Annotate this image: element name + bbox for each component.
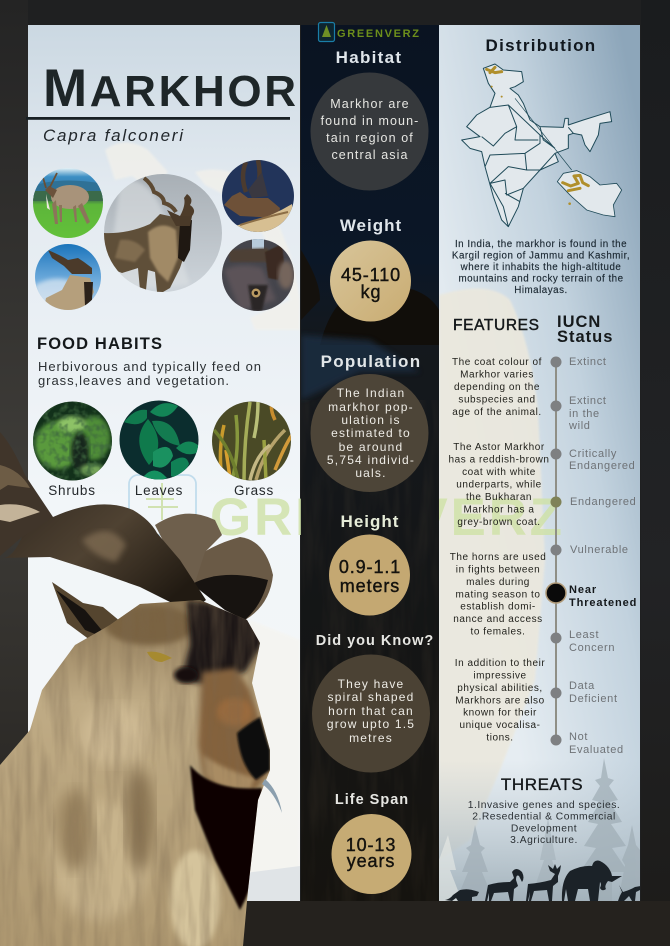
animal: big cat (445, 889, 479, 901)
timeline: IUCN status: Near (569, 584, 597, 596)
text: features: The coat colour of (452, 357, 542, 368)
text: features: impressive (473, 670, 527, 682)
text: features: Markhors are also (455, 696, 545, 706)
panel: left background (28, 25, 300, 901)
did you know: Did you Know? (316, 633, 434, 649)
did you know: They have (338, 677, 404, 691)
animal: monkey (618, 885, 641, 901)
animal: deer (526, 864, 561, 901)
timeline: IUCN status: wild (568, 420, 591, 432)
text: threats list: 1.Invasive genes and species. (468, 800, 620, 811)
text: features: grey-brown coat. (457, 517, 541, 528)
heading: IUCN status: Status (557, 328, 613, 346)
text: features: to females. (471, 626, 525, 638)
food: leaves (119, 400, 199, 498)
heading: distribution: Distribution (486, 36, 596, 55)
did you know: grow upto 1.5 (327, 717, 415, 731)
text: features: physical abilities, (457, 683, 543, 694)
photo: markhor on meadow (33, 168, 103, 238)
text: features: mating season to (456, 590, 540, 600)
watermark: Greenverz (129, 475, 562, 547)
population: be around (339, 440, 403, 454)
text: features: Markhor varies (460, 370, 534, 380)
timeline: IUCN status: Not (569, 731, 588, 743)
photo: markhor standing, large (104, 174, 222, 292)
timeline: IUCN status (546, 356, 637, 756)
timeline: IUCN status: Deficient (569, 693, 618, 705)
population: Population (321, 352, 421, 371)
text: India distribution description: Kargil region of Jammu and Kashmir, (452, 250, 630, 262)
centre column (310, 48, 434, 894)
timeline: IUCN status: in the (569, 408, 600, 420)
text: food habits description: Herbivorous and typically feed on (38, 359, 261, 374)
logo: Greenverz (318, 22, 419, 42)
map: range highlights (487, 67, 588, 191)
text: features: The Astor Markhor (453, 442, 545, 453)
photo: markhor against sky (35, 244, 101, 312)
height (329, 512, 410, 616)
photo: markhor on log (222, 160, 294, 232)
did you know: metres (349, 731, 393, 745)
text: features: in fights between (456, 564, 540, 576)
text: threats list: 3.Agriculture. (510, 835, 578, 846)
text: features: depending on the (454, 382, 540, 393)
habitat: central asia (331, 148, 409, 162)
height: meters (340, 576, 400, 596)
heading: IUCN status: IUCN (557, 313, 601, 331)
habitat: Markhor are (330, 97, 410, 111)
food: grass (212, 401, 292, 498)
text: features (448, 357, 550, 744)
text: threats list (468, 800, 620, 846)
weight: Weight (340, 216, 402, 235)
horn: rear large (185, 537, 273, 620)
map: India distribution (462, 64, 622, 227)
animal: ibex (485, 869, 524, 901)
logo: Greenverz: GREENVERZ (337, 28, 419, 40)
life span: years (347, 851, 395, 871)
text: food habits description (38, 359, 261, 388)
timeline: IUCN status: Data (569, 680, 595, 692)
population: estimated to (331, 426, 411, 440)
ghost goat silhouette (439, 289, 545, 860)
photo: markhor eye closeup (222, 239, 294, 311)
did you know (312, 633, 434, 772)
text: features: known for their (463, 708, 537, 718)
timeline: IUCN status: Threatened (569, 597, 637, 609)
population: 5,754 individ- (327, 453, 415, 467)
heading: IUCN status (557, 313, 613, 346)
horn: rear middle (155, 514, 222, 592)
title: Markhor: MARKHOR (43, 59, 296, 118)
watermark logo box (129, 475, 196, 535)
life span: 10-13 (346, 835, 396, 855)
map: India outline (462, 64, 612, 227)
horn: left tip (0, 432, 55, 556)
text: features: In addition to their (455, 658, 545, 669)
text: India distribution description: In India, the markhor is found in the (455, 239, 627, 250)
population: uals. (355, 466, 387, 480)
photo circles (30, 160, 294, 312)
timeline: IUCN status: Endangered (569, 460, 635, 472)
habitat: tain region of (326, 131, 414, 145)
text: features: nance and access (453, 614, 543, 625)
timeline: IUCN status: Extinct (569, 395, 607, 407)
heading: threats: THREATS (501, 775, 583, 794)
text: features: subspecies and (458, 394, 536, 406)
weight: 45-110 (341, 265, 401, 285)
fur shading (105, 605, 195, 645)
subtitle: scientific name: Capra falconeri (43, 126, 184, 145)
body fur (0, 600, 270, 946)
text: features: the Bukharan (466, 492, 532, 503)
animal: elephant (562, 861, 622, 901)
timeline: IUCN status: Concern (569, 642, 615, 654)
did you know: horn that can (328, 704, 414, 718)
map: Kashmir inset (557, 171, 622, 217)
muzzle (198, 668, 270, 791)
panel: right background (439, 25, 640, 901)
text: India distribution description: mountains and rocky terrain of the (458, 274, 624, 284)
goatee tuft (262, 779, 282, 813)
text: threats list: 2.Resedential & Commercial (472, 812, 616, 822)
height: 0.9-1.1 (339, 557, 401, 577)
timeline: IUCN status: Extinct (569, 356, 607, 368)
text: India distribution description (452, 239, 630, 296)
weight: kg (361, 282, 381, 302)
animal silhouettes (445, 861, 641, 901)
text: features: establish domi- (460, 602, 536, 612)
text: threats list: Development (511, 824, 577, 834)
markhor foreground portrait (0, 432, 282, 946)
text: features: coat with white (462, 467, 536, 478)
food: leaves: Leaves (135, 483, 183, 498)
heading: features: FEATURES (453, 317, 539, 334)
ghost horn silhouette (106, 142, 298, 328)
habitat: Habitat (336, 48, 402, 67)
nose (237, 717, 270, 780)
timeline: IUCN status: Critically (569, 448, 617, 460)
panel: centre background (301, 25, 439, 901)
text: features: The horns are used (450, 552, 546, 563)
food: shrubs (33, 401, 113, 498)
text: features: age of the animal. (452, 407, 542, 418)
habitat: found in moun- (321, 114, 419, 128)
text: features: has a reddish-brown (448, 454, 550, 466)
text: India distribution description: where it inhabits the high-altitude (460, 262, 621, 273)
text: features: underparts, while (456, 480, 542, 490)
horn: main (0, 504, 206, 612)
text: India distribution description: Himalayas. (514, 285, 568, 296)
timeline: IUCN status: Vulnerable (570, 544, 629, 556)
heading: food habits: FOOD HABITS (37, 335, 162, 353)
text: features: tions. (486, 732, 514, 744)
population (310, 352, 428, 492)
text: food habits description: grass,leaves and vegetation. (38, 373, 229, 388)
forest silhouettes (462, 758, 640, 890)
did you know: spiral shaped (328, 690, 414, 704)
watermark: Greenverz: GREENVERZ (210, 488, 562, 547)
life span: Life Span (335, 792, 409, 808)
text: features: males during (466, 577, 530, 588)
timeline: IUCN status: Least (569, 629, 599, 641)
habitat (310, 48, 428, 190)
beard (190, 765, 262, 910)
text: features: unique vocalisa- (459, 720, 541, 731)
population: The Indian (337, 386, 405, 400)
timeline: IUCN status: Endangered (570, 496, 636, 508)
population: markhor pop- (328, 400, 414, 414)
height: Height (341, 512, 399, 531)
population: ulation is (341, 413, 401, 427)
food: shrubs: Shrubs (48, 483, 96, 498)
weight (330, 216, 411, 322)
eye (174, 667, 198, 683)
timeline: IUCN status: Evaluated (569, 744, 624, 756)
map: connector line (515, 98, 572, 170)
ear (52, 582, 127, 653)
food: grass: Grass (234, 483, 274, 498)
life span (332, 792, 412, 894)
text: features: Markhor has a (463, 504, 535, 516)
